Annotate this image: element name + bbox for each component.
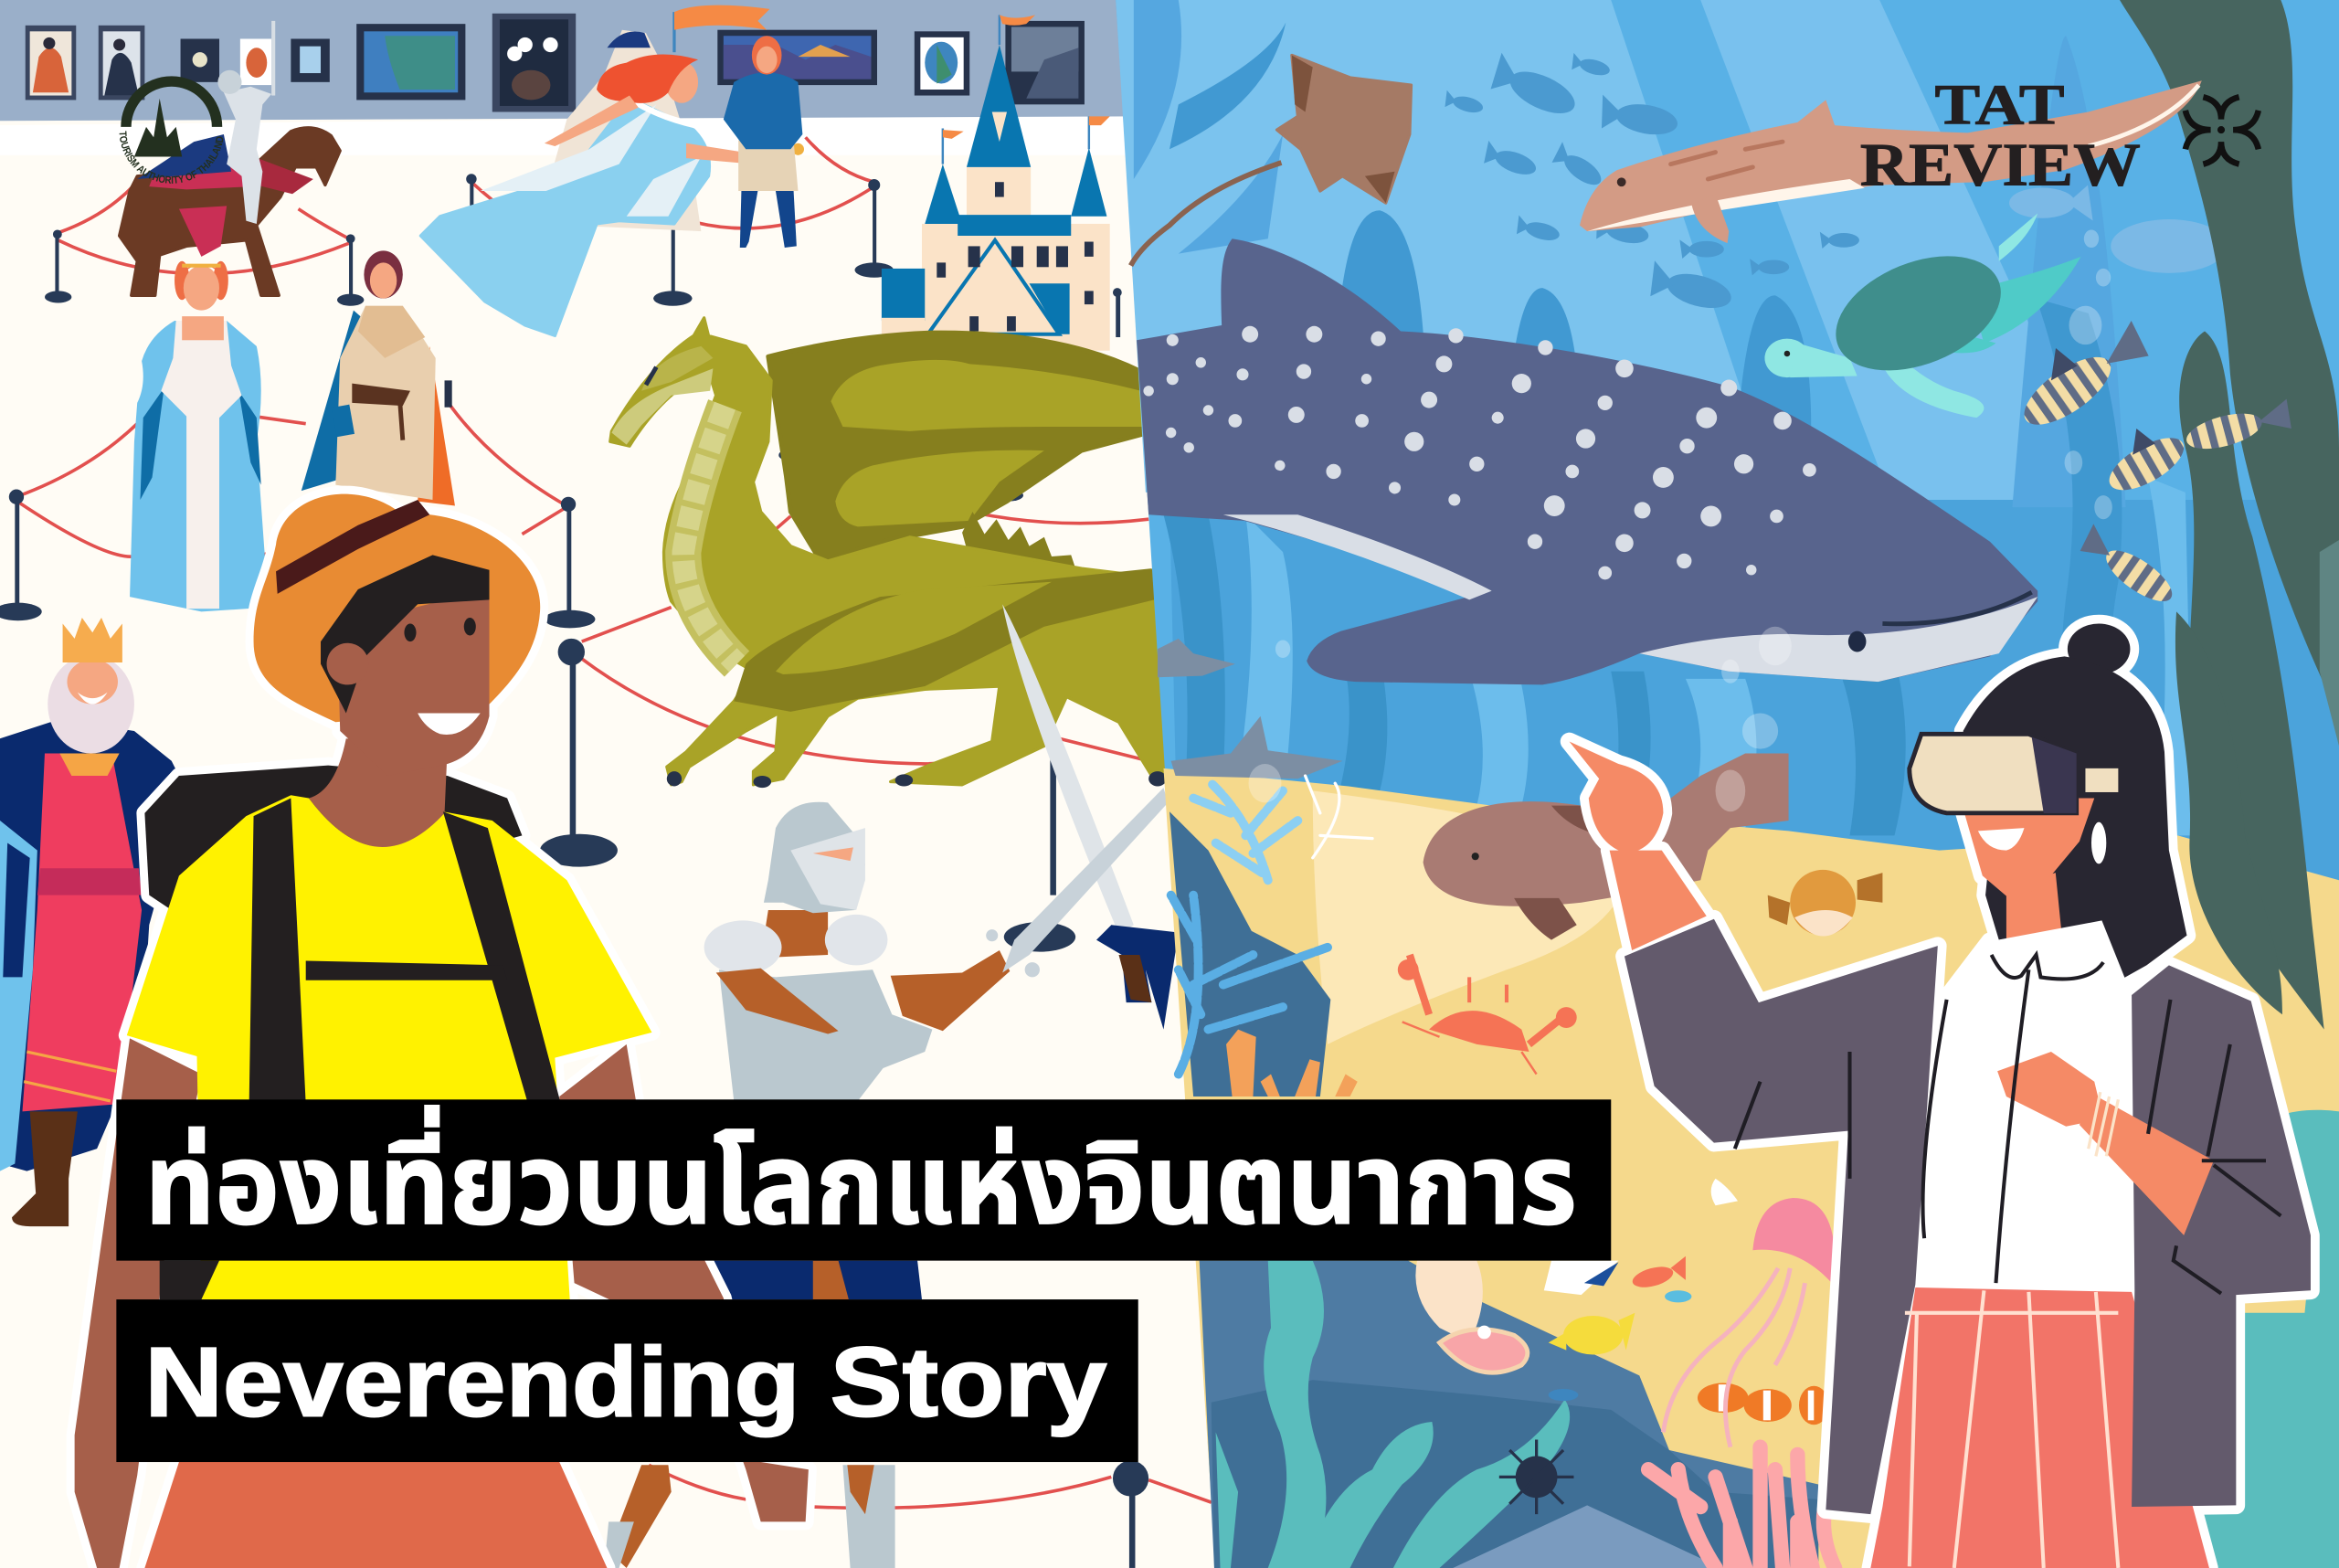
striped fish xyxy=(2002,303,2294,610)
bubbles xyxy=(1249,229,2112,811)
traveller shirt xyxy=(127,795,651,1299)
knight on horse xyxy=(120,21,340,295)
knight with sword xyxy=(604,604,1179,1568)
knight helmet xyxy=(764,802,865,913)
panel: left museum background xyxy=(0,0,1193,1568)
traveller arms xyxy=(75,1038,201,1568)
school of fish silhouettes xyxy=(1443,53,2259,317)
woman jacket xyxy=(1625,919,1938,1514)
logo word TAT: TAT xyxy=(1935,75,2065,137)
panel: right underwater background xyxy=(1116,0,2339,1568)
woman hair xyxy=(2068,623,2130,674)
dragon feet xyxy=(667,771,1167,788)
small reef fish xyxy=(1544,1179,1829,1425)
crab xyxy=(1398,955,1577,1075)
fairy xyxy=(420,55,804,335)
logo symbol xyxy=(2186,97,2259,164)
man in beige tunic xyxy=(302,250,455,506)
woman face xyxy=(1960,799,2094,901)
TAT REVIEW logo xyxy=(1860,75,2141,198)
teal plants bottom right xyxy=(2193,1110,2339,1568)
castle xyxy=(882,45,1110,351)
pufferfish xyxy=(1768,870,1882,937)
traveller neck xyxy=(309,738,448,847)
title: English headline bar xyxy=(116,1299,1138,1462)
light blue branching coral xyxy=(1171,776,1372,1075)
woman raised arm xyxy=(1610,851,1707,950)
woman shirt xyxy=(1915,920,2134,1290)
crossed swords xyxy=(1002,604,1134,934)
VR headset xyxy=(1910,734,2077,813)
giant clam with pearl xyxy=(1415,1261,1528,1372)
dragon body, neck and legs xyxy=(610,318,1167,785)
traveller hat xyxy=(254,494,540,722)
lower rocks and reef xyxy=(1200,1261,1818,1568)
rope barriers xyxy=(16,137,1212,1508)
dragon near wing xyxy=(734,568,1167,712)
dragon wing, far side xyxy=(768,333,1148,561)
knight torso xyxy=(719,969,932,1101)
woman pants xyxy=(1870,1287,2209,1568)
whale shark xyxy=(1137,238,2037,684)
sea urchin xyxy=(1516,1457,1557,1498)
hat band xyxy=(276,500,429,594)
knight shoulders and neck xyxy=(761,910,828,958)
dragon belly scales xyxy=(683,406,737,664)
rope stanchions xyxy=(0,174,1148,1568)
woman wearing VR headset xyxy=(1570,623,2311,1568)
woman smile and earring xyxy=(1978,828,2025,851)
jellyfish xyxy=(1663,1198,1835,1447)
title: Thai headline bar: ท่องเที่ยวบนโลกแห่งจินตนาการ xyxy=(144,1105,1577,1248)
dragon back spikes xyxy=(962,512,1077,573)
tent behind fairy xyxy=(537,30,701,231)
title: English headline bar: Neverending Story xyxy=(144,1326,1106,1436)
traveller hair and features xyxy=(321,555,490,713)
teal seaweed xyxy=(1264,1261,1326,1568)
sand floor xyxy=(1163,768,2339,1568)
left rock and corals xyxy=(1170,811,1358,1097)
background kelp domes xyxy=(1134,0,2126,507)
dugong xyxy=(1424,754,1789,940)
dragon eye xyxy=(646,367,656,385)
woman neck xyxy=(2006,873,2061,948)
dragon head xyxy=(611,368,713,445)
pink branch coral xyxy=(1648,1447,1835,1568)
big seaweed blades xyxy=(2120,0,2339,1030)
dragon xyxy=(610,318,1167,788)
TAT logo seal xyxy=(119,76,223,184)
traveller with backpack xyxy=(75,494,809,1568)
king xyxy=(0,618,186,1226)
gallery paintings xyxy=(26,5,1085,111)
whale spots xyxy=(1143,326,1816,579)
knight legs xyxy=(609,1465,672,1568)
backpack straps xyxy=(160,799,561,1299)
TAT logo seal: TOURISM AUTHORITY OF THAILAND xyxy=(119,131,223,184)
traveller backpack xyxy=(144,766,522,925)
kelp strands below whale xyxy=(1163,299,2193,835)
horse xyxy=(120,128,340,295)
traveller face xyxy=(337,589,490,776)
traveller shorts xyxy=(144,1462,607,1568)
jacket and shirt lines xyxy=(1735,955,2281,1294)
woman forearm and hand xyxy=(2080,1095,2214,1235)
queen in blue dress xyxy=(130,261,269,611)
leopard shark xyxy=(1580,80,2202,243)
blue armoured knight xyxy=(724,36,802,248)
stingray xyxy=(1131,55,1411,266)
logo word REVIEW: REVIEW xyxy=(1860,131,2141,198)
grey reef sharks xyxy=(1158,639,1342,779)
sea turtle xyxy=(1764,214,2081,418)
knight arms xyxy=(716,969,839,1033)
rider xyxy=(224,87,271,224)
